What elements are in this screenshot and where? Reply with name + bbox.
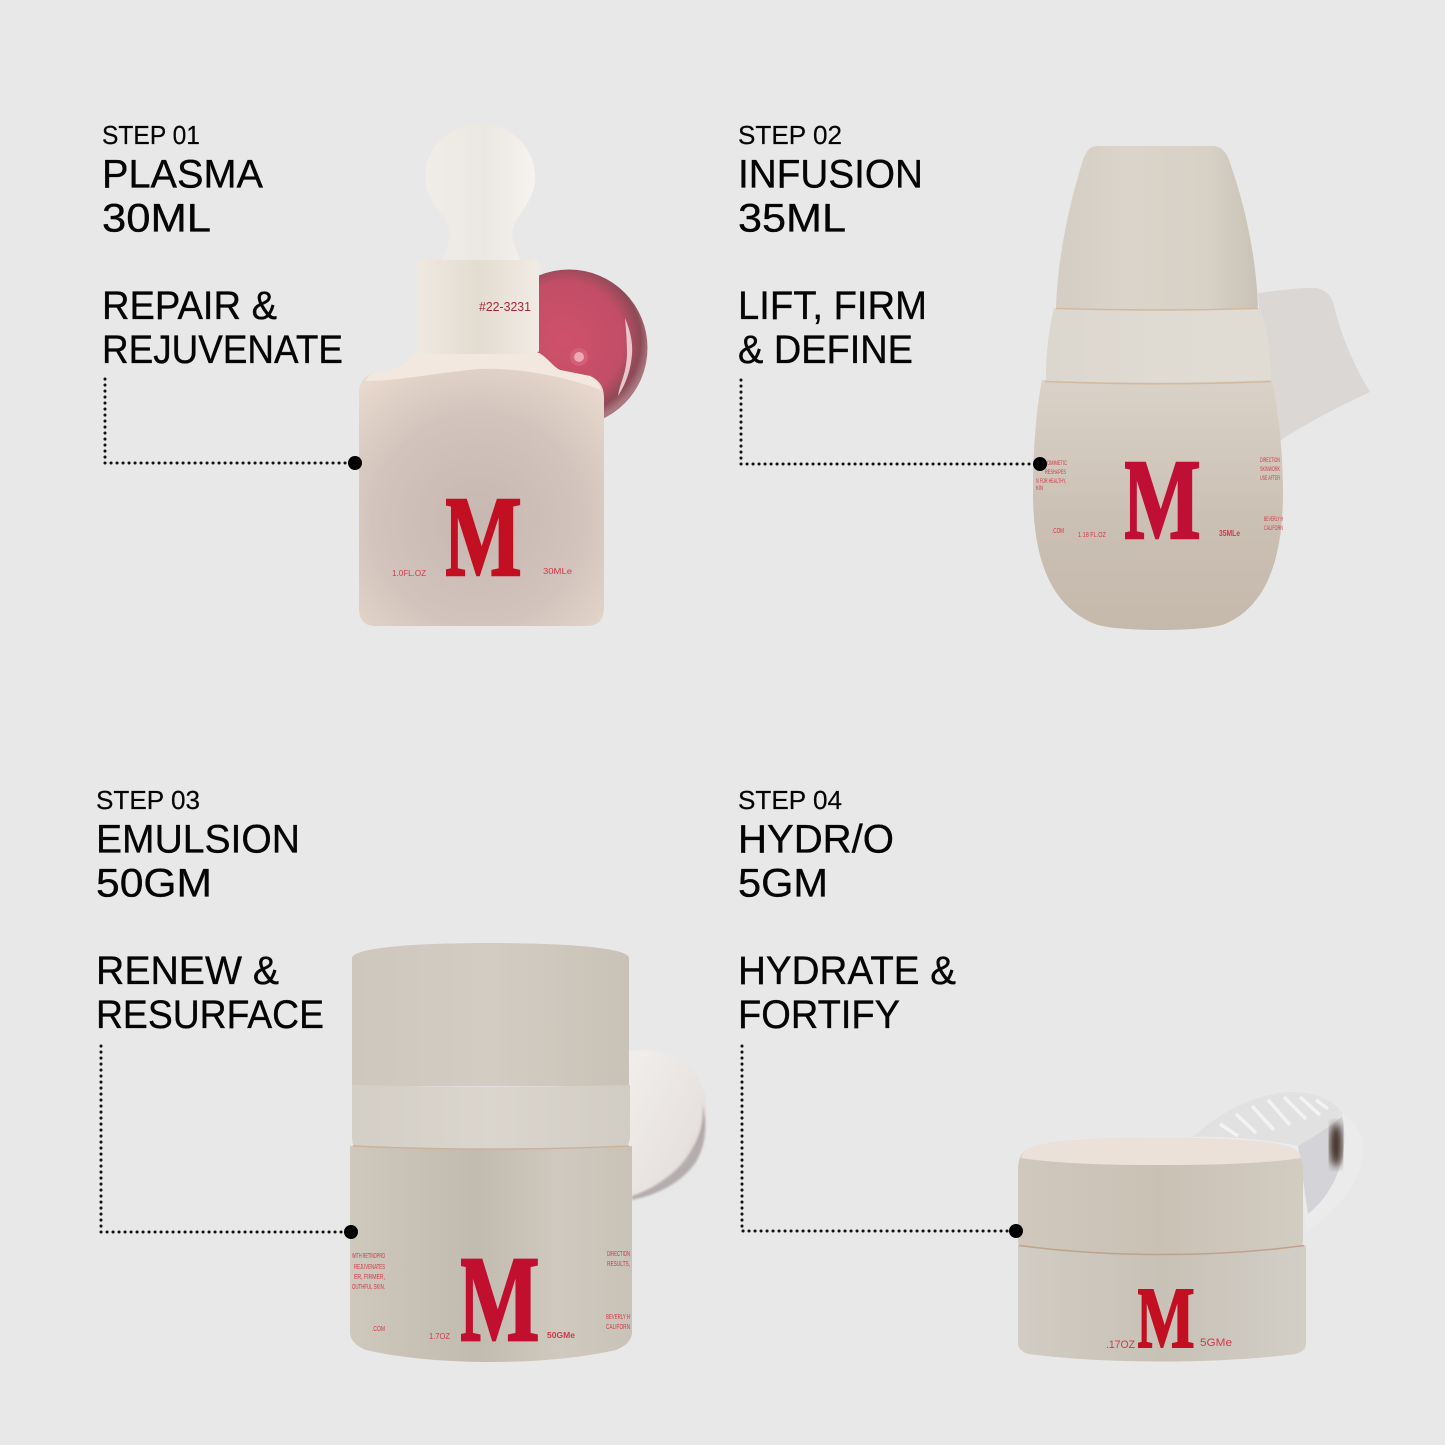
volume labels: .17OZ — [1106, 1339, 1135, 1351]
connector: step 04 — [742, 1046, 1023, 1238]
step 02 text: INFUSION — [738, 152, 923, 196]
step 03 text: STEP 03 — [96, 785, 200, 815]
step 01 text: 30ML — [102, 196, 211, 240]
lower rounded body — [1033, 380, 1283, 630]
jar lid — [1018, 1138, 1303, 1255]
logo M: M — [1122, 436, 1201, 563]
label text — [352, 1251, 630, 1341]
volume labels — [1106, 1337, 1232, 1351]
step 02 text — [738, 120, 927, 372]
step 04 text: HYDR/O — [738, 818, 894, 862]
label text right: 35MLe — [1219, 529, 1240, 538]
label text: RESULTS, — [607, 1261, 630, 1268]
step 04 text: 5GM — [738, 862, 828, 906]
step 03 text — [96, 785, 324, 1037]
volume labels: 30MLe — [543, 566, 572, 576]
label text: CALIFORN — [606, 1324, 630, 1331]
step 01 text — [102, 120, 343, 372]
product: hydr/o mini jar — [1018, 1092, 1363, 1367]
jar base — [1018, 1245, 1306, 1362]
label text: BEVERLY H — [606, 1314, 630, 1321]
label text: WITH RETINOPRO — [352, 1253, 385, 1260]
step 03 text: 50GM — [96, 862, 212, 906]
label text: 1.7OZ — [429, 1331, 450, 1341]
step 03 text: RENEW & — [96, 949, 279, 993]
logo M: M — [1136, 1270, 1195, 1367]
swatch: white cream smear — [1258, 288, 1370, 442]
square bottle body — [359, 353, 604, 626]
label text right: DIRECTION — [1260, 458, 1280, 464]
step 04 text: STEP 04 — [738, 785, 842, 815]
label text: REJUVENATES — [354, 1264, 385, 1271]
step 04 text: HYDRATE & — [738, 949, 956, 993]
step 04 text — [738, 785, 956, 1037]
connector: step 03 — [101, 1046, 358, 1239]
collar with batch code: #22-3231 — [479, 300, 531, 314]
product: infusion bottle — [1033, 146, 1370, 630]
product: plasma dropper bottle — [359, 124, 648, 626]
product: emulsion jar — [350, 943, 707, 1367]
label text left: RESHAPES — [1045, 470, 1066, 476]
volume labels: 5GMe — [1200, 1337, 1232, 1349]
connector: step 01 — [105, 379, 362, 470]
label text left: 1.18 FL.OZ — [1078, 530, 1106, 539]
step 01 text: REJUVENATE — [102, 328, 343, 372]
volume labels: 1.0FL.OZ — [392, 568, 426, 578]
label text right — [1219, 458, 1283, 538]
step 02 text: STEP 02 — [738, 120, 842, 150]
swatch: ridged applicator cream — [1193, 1092, 1363, 1232]
volume labels — [392, 566, 572, 578]
logo M: M — [458, 1231, 539, 1367]
jar base — [350, 1146, 632, 1362]
label text: DIRECTION — [607, 1251, 630, 1258]
connector: step 02 — [741, 380, 1047, 471]
dropper bulb — [425, 124, 535, 260]
label text right: CALIFORN — [1264, 526, 1283, 532]
upper cap — [1056, 146, 1258, 310]
label text left: N FOR HEALTHY, — [1036, 479, 1066, 485]
swatch: cream smear — [628, 1050, 707, 1200]
step 04 text: FORTIFY — [738, 993, 900, 1037]
step 03 text: EMULSION — [96, 818, 300, 862]
label text right: BEVERLY H — [1264, 517, 1283, 523]
label text left: KIN — [1036, 486, 1043, 492]
swatch: red plasma drop — [490, 270, 648, 426]
logo M: M — [444, 473, 522, 600]
jar lid — [352, 943, 629, 1086]
label text left: OMIMETIC — [1047, 461, 1067, 467]
middle collar — [1046, 308, 1271, 382]
step 02 text: LIFT, FIRM — [738, 284, 927, 328]
label text: .COM — [372, 1324, 385, 1333]
collar with batch code — [417, 260, 539, 354]
label text right: SKINWORK — [1260, 467, 1280, 473]
label text left — [1036, 461, 1106, 539]
step 02 text: 35ML — [738, 196, 846, 240]
jar collar — [352, 1085, 630, 1150]
step 01 text: STEP 01 — [102, 120, 200, 150]
label text: 50GMe — [547, 1330, 575, 1340]
label text: OUTHFUL SKIN. — [352, 1284, 385, 1291]
step 02 text: & DEFINE — [738, 328, 913, 372]
label text right: USE AFTER — [1260, 476, 1280, 482]
step 01 text: PLASMA — [102, 152, 263, 196]
step 03 text: RESURFACE — [96, 993, 324, 1037]
label text left: .COM — [1052, 528, 1064, 535]
step 01 text: REPAIR & — [102, 284, 277, 328]
label text: ER, FIRMER, — [354, 1274, 385, 1281]
